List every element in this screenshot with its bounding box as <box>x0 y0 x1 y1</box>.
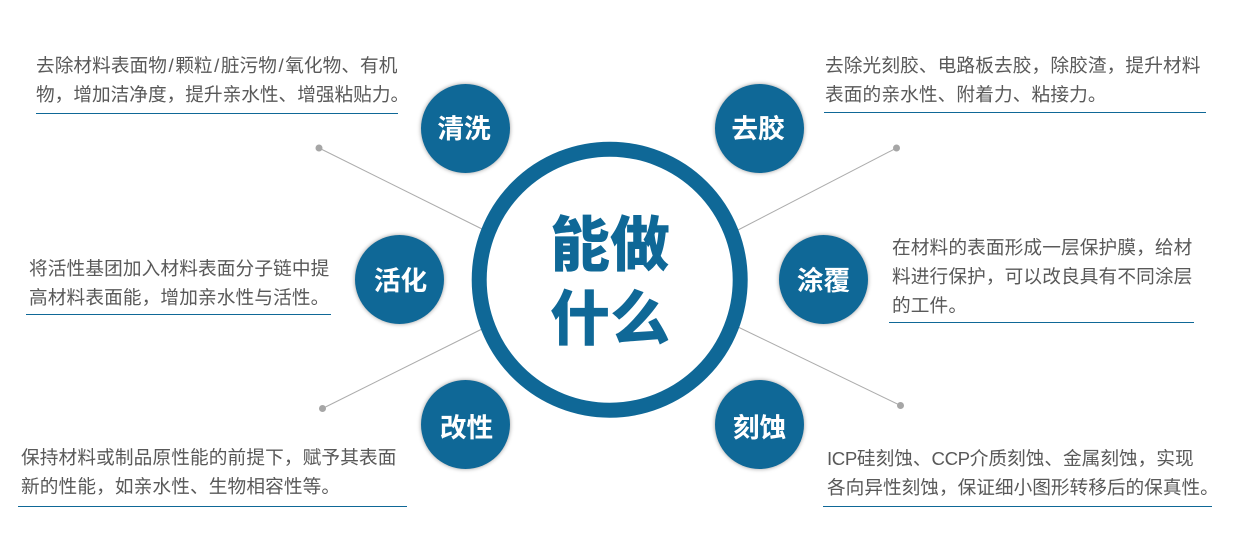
text block: 刻蚀 description: ICP硅刻蚀、CCP介质刻蚀、金属刻蚀，实现 <box>827 448 1194 469</box>
text block: 清洗 description <box>36 55 409 114</box>
node: 清洗 <box>421 84 510 173</box>
node: 去胶: 去胶 <box>731 114 785 144</box>
text block: 清洗 description: 去除材料表面物/颗粒/脏污物/氧化物、有机 <box>36 55 397 76</box>
text block: 去胶 description: 去除光刻胶、电路板去胶，除胶渣，提升材料 <box>825 55 1201 76</box>
text block: 去胶 description <box>824 55 1206 113</box>
node: 刻蚀: 刻蚀 <box>733 413 786 443</box>
node: 涂覆 <box>779 235 868 324</box>
text block: 涂覆 description: 的工件。 <box>892 295 967 316</box>
centre title <box>550 212 670 353</box>
text block: 清洗 description: 物，增加洁净度，提升亲水性、增强粘贴力。 <box>36 84 409 105</box>
centre title: 能做 <box>550 212 670 279</box>
node: 刻蚀 <box>715 380 804 469</box>
node: 涂覆: 涂覆 <box>797 266 850 296</box>
text block: 活化 description: 将活性基团加入材料表面分子链中提 <box>29 258 329 279</box>
text block: 活化 description <box>26 258 331 315</box>
text block: 活化 description: 高材料表面能，增加亲水性与活性。 <box>29 287 329 308</box>
text block: 涂覆 description <box>889 237 1194 323</box>
node: 去胶 <box>715 84 804 173</box>
text block: 涂覆 description: 在材料的表面形成一层保护膜，给材 <box>892 237 1192 258</box>
node: 改性: 改性 <box>440 413 493 443</box>
text block: 去胶 description: 表面的亲水性、附着力、粘接力。 <box>825 84 1107 105</box>
node: 清洗: 清洗 <box>437 114 491 144</box>
text block: 改性 description: 新的性能，如亲水性、生物相容性等。 <box>21 476 340 497</box>
centre title: 什么 <box>550 286 670 353</box>
text block: 涂覆 description: 料进行保护，可以改良具有不同涂层 <box>892 266 1192 287</box>
node: 活化: 活化 <box>374 266 427 296</box>
text block: 刻蚀 description <box>823 448 1219 507</box>
text block: 改性 description: 保持材料或制品原性能的前提下，赋予其表面 <box>21 447 397 468</box>
node: 活化 <box>355 235 444 324</box>
text block: 改性 description <box>18 447 407 507</box>
text block: 刻蚀 description: 各向异性刻蚀，保证细小图形转移后的保真性。 <box>827 477 1219 498</box>
node: 改性 <box>421 380 510 469</box>
